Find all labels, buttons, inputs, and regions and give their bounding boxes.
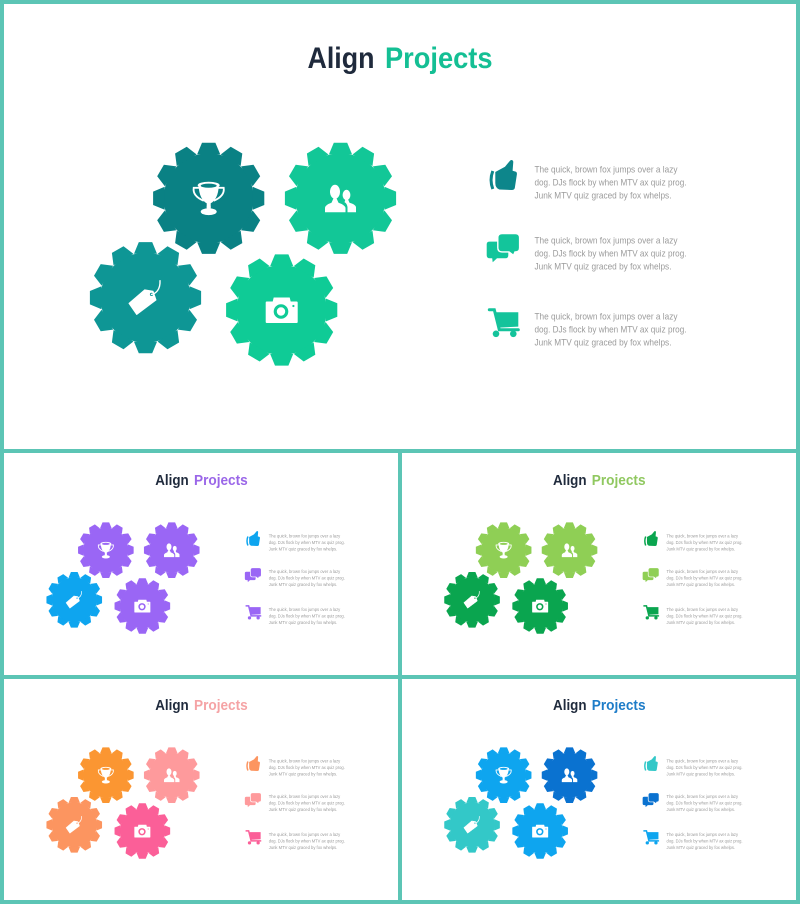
panel: blue variant (399, 676, 794, 899)
icon: chat bubbles (245, 793, 261, 807)
icon: shopping cart (246, 831, 261, 845)
title: Align Projects blue: Align (553, 697, 587, 714)
text block 2: Junk MTV quiz graced by fox whelps. (667, 807, 735, 813)
gear: camera (512, 803, 568, 859)
text block 2: Junk MTV quiz graced by fox whelps. (269, 807, 337, 813)
gear: price tag (90, 242, 201, 353)
text block 3: dog. DJs flock by when MTV ax quiz prog. (269, 613, 345, 619)
text block 3: The quick, brown fox jumps over a lazy (667, 832, 739, 838)
icon: chat bubbles (643, 568, 659, 582)
icon: shopping cart (246, 606, 261, 620)
text block 1: Junk MTV quiz graced by fox whelps. (667, 546, 735, 552)
text block 2: The quick, brown fox jumps over a lazy (534, 236, 678, 246)
title: Align Projects purple: Align (155, 472, 189, 489)
text block 3: dog. DJs flock by when MTV ax quiz prog. (667, 838, 743, 844)
text block 2: Junk MTV quiz graced by fox whelps. (269, 582, 337, 588)
text block 1: The quick, brown fox jumps over a lazy (269, 758, 341, 764)
text block 3: The quick, brown fox jumps over a lazy (269, 832, 341, 838)
text block 3: dog. DJs flock by when MTV ax quiz prog. (534, 324, 686, 336)
text block 1: The quick, brown fox jumps over a lazy (534, 164, 678, 176)
icon: chat bubbles (643, 793, 659, 807)
text block 2: dog. DJs flock by when MTV ax quiz prog. (667, 575, 743, 581)
gear: trophy (153, 143, 264, 254)
gear: camera (115, 803, 170, 859)
text block 1: Junk MTV quiz graced by fox whelps. (269, 546, 337, 552)
icon: thumbs up (491, 160, 517, 190)
gear: trophy (476, 522, 531, 578)
gear: camera (226, 254, 337, 366)
gear: price tag (46, 572, 102, 628)
gear: trophy (78, 747, 134, 803)
gear: trophy (78, 522, 134, 578)
text block 1: Junk MTV quiz graced by fox whelps. (269, 771, 337, 777)
gear: price tag (444, 572, 500, 628)
text block 2: dog. DJs flock by when MTV ax quiz prog. (269, 800, 345, 806)
panel: main teal slide (0, 0, 800, 451)
text block 1: dog. DJs flock by when MTV ax quiz prog. (534, 178, 686, 188)
icon: chat bubbles (487, 234, 520, 262)
text block 2: The quick, brown fox jumps over a lazy (667, 569, 739, 575)
icon: thumbs up (645, 531, 658, 546)
text block 1: The quick, brown fox jumps over a lazy (667, 758, 739, 764)
text block 1: The quick, brown fox jumps over a lazy (269, 533, 341, 539)
icon: shopping cart (644, 606, 658, 620)
text block 2: The quick, brown fox jumps over a lazy (269, 569, 341, 575)
title: Align Projects green: Align (553, 472, 587, 489)
title: Align Projects blue: Projects (592, 697, 646, 714)
title: Align Projects pink: Projects (194, 697, 248, 714)
icon: shopping cart (489, 310, 518, 337)
text block 2: Junk MTV quiz graced by fox whelps. (667, 582, 735, 588)
text block 3: Junk MTV quiz graced by fox whelps. (667, 620, 735, 626)
text block 3: The quick, brown fox jumps over a lazy (667, 607, 739, 613)
title: Align Projects purple: Projects (194, 472, 248, 489)
gear: trophy (476, 747, 531, 803)
text block 1: Junk MTV quiz graced by fox whelps. (534, 190, 672, 202)
gear: price tag (444, 797, 500, 853)
panel: purple variant (2, 451, 396, 674)
gear: users (144, 747, 200, 803)
gear: camera (512, 578, 568, 634)
title: Align Projects green: Projects (592, 472, 646, 489)
panel: orange and pink variant (2, 676, 396, 899)
text block 2: Junk MTV quiz graced by fox whelps. (534, 262, 672, 272)
text block 3: The quick, brown fox jumps over a lazy (269, 607, 341, 613)
gear: camera (115, 578, 170, 634)
title: Align Projects: Projects (385, 42, 492, 75)
text block 3: Junk MTV quiz graced by fox whelps. (269, 845, 337, 851)
text block 1: The quick, brown fox jumps over a lazy (667, 533, 739, 539)
gear: users (285, 143, 396, 254)
text block 3: Junk MTV quiz graced by fox whelps. (534, 338, 672, 348)
title: Align Projects: Align (308, 42, 374, 75)
text block 2: dog. DJs flock by when MTV ax quiz prog. (534, 248, 686, 260)
text block 3: dog. DJs flock by when MTV ax quiz prog. (667, 613, 743, 619)
text block 1: dog. DJs flock by when MTV ax quiz prog. (667, 540, 743, 546)
gear: users (542, 522, 597, 578)
icon: chat bubbles (245, 568, 261, 582)
text block 1: dog. DJs flock by when MTV ax quiz prog. (269, 540, 345, 546)
gear: users (542, 747, 597, 803)
text block 2: The quick, brown fox jumps over a lazy (667, 794, 739, 800)
panel: green variant (399, 451, 794, 674)
text block 1: Junk MTV quiz graced by fox whelps. (667, 771, 735, 777)
gear: price tag (46, 797, 102, 853)
title: Align Projects pink: Align (155, 697, 189, 714)
text block 3: Junk MTV quiz graced by fox whelps. (269, 620, 337, 626)
text block 2: dog. DJs flock by when MTV ax quiz prog. (269, 575, 345, 581)
text block 3: Junk MTV quiz graced by fox whelps. (667, 845, 735, 851)
icon: thumbs up (247, 756, 260, 771)
text block 1: dog. DJs flock by when MTV ax quiz prog. (269, 765, 345, 771)
icon: thumbs up (247, 531, 260, 546)
icon: thumbs up (645, 756, 658, 771)
text block 3: dog. DJs flock by when MTV ax quiz prog. (269, 838, 345, 844)
icon: shopping cart (644, 831, 658, 845)
text block 1: dog. DJs flock by when MTV ax quiz prog. (667, 765, 743, 771)
text block 3: The quick, brown fox jumps over a lazy (534, 312, 678, 322)
gear: users (144, 522, 200, 578)
text block 2: The quick, brown fox jumps over a lazy (269, 794, 341, 800)
text block 2: dog. DJs flock by when MTV ax quiz prog. (667, 800, 743, 806)
